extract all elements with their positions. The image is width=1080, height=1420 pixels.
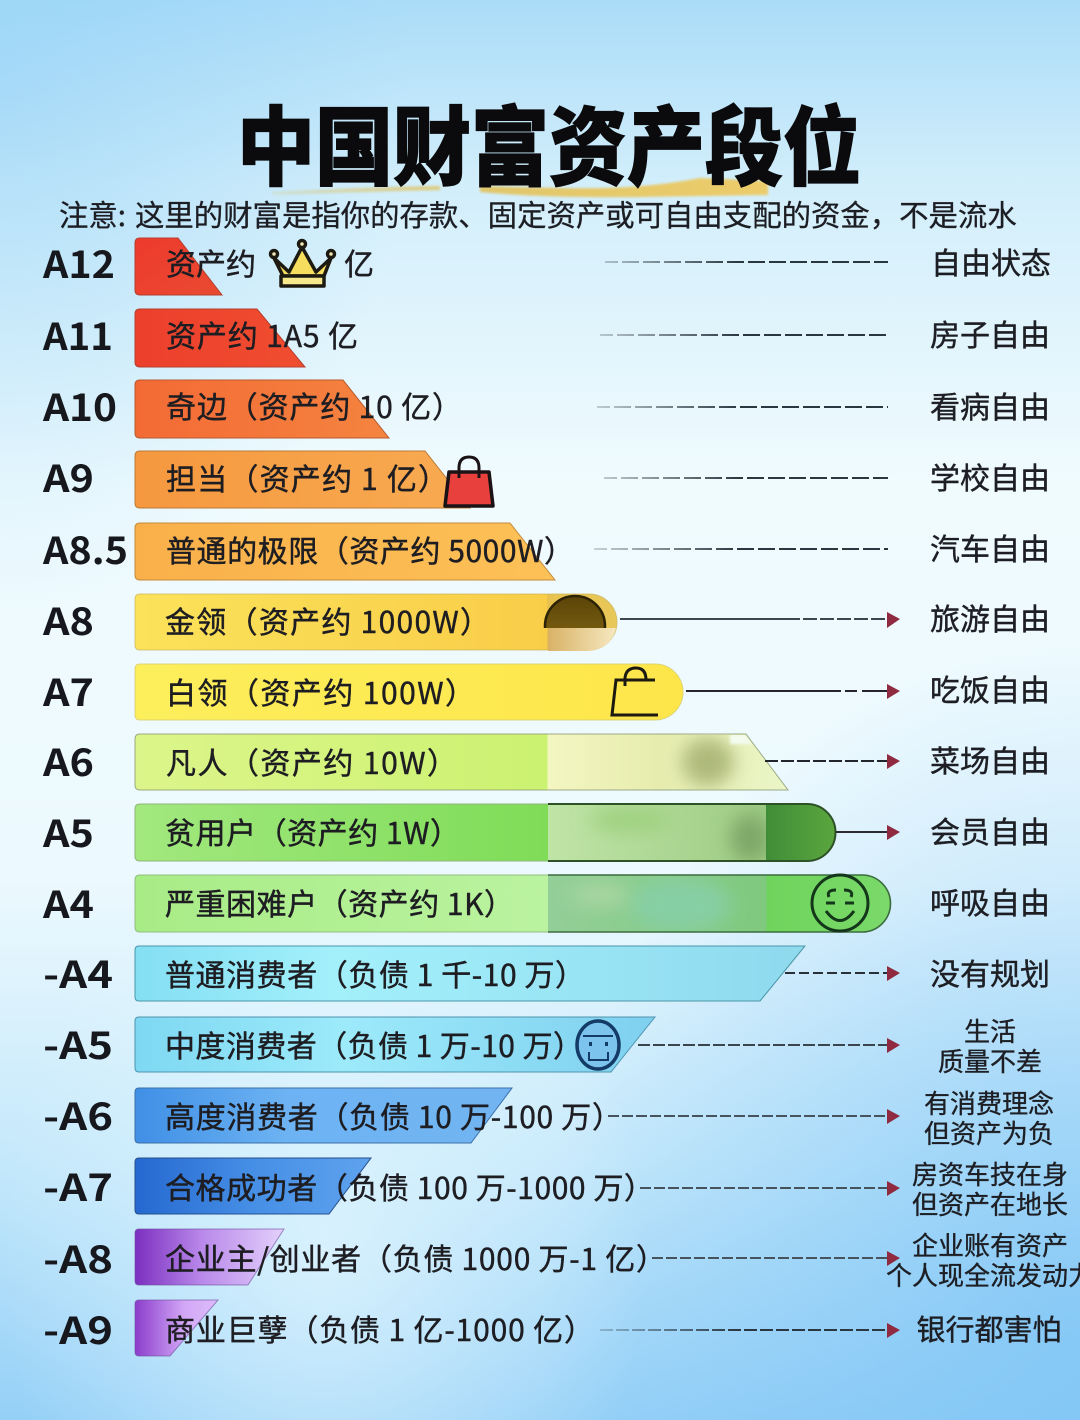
- bar A4: [135, 875, 890, 932]
- bar -A6: [135, 1088, 512, 1143]
- level A12: A12: [42, 235, 115, 289]
- bar text A12: 资产约: [166, 240, 256, 284]
- row: A9: [42, 449, 1050, 508]
- row: A5: [42, 804, 1050, 862]
- bar -A4: [135, 946, 805, 1001]
- bar text A10: 奇边（资产约 10 亿）: [166, 383, 462, 427]
- connector A12: [605, 261, 888, 263]
- bar text A6: 凡人（资产约 10W）: [166, 739, 457, 783]
- row: A11: [42, 307, 1050, 367]
- bar A11: [135, 309, 305, 367]
- outcome -A7: [912, 1155, 1068, 1222]
- level A6: A6: [42, 733, 94, 787]
- connector A11: [600, 334, 888, 336]
- connector -A5: [638, 1038, 900, 1053]
- outcome A4: 呼吸自由: [930, 879, 1050, 923]
- bar text -A8: 企业主/创业者（负债 1000 万-1 亿）: [165, 1235, 666, 1279]
- connector -A6: [608, 1109, 900, 1124]
- bar text -A9: 商业巨孽（负债 1 亿-1000 亿）: [165, 1306, 594, 1350]
- bar text -A5: 中度消费者（负债 1 万-10 万）: [165, 1022, 583, 1066]
- icon: coin: [544, 594, 606, 628]
- level -A4: -A4: [43, 945, 113, 999]
- row: A7: [42, 663, 1050, 720]
- outcome -A6: [924, 1084, 1054, 1151]
- level A8.5: A8.5: [42, 521, 128, 575]
- bar A9: [135, 451, 470, 508]
- row: A12: [42, 235, 1051, 295]
- bar -A8: [135, 1229, 284, 1285]
- level A10: A10: [42, 378, 117, 432]
- connector A7: [686, 684, 900, 699]
- outcome -A9: 银行都害怕: [916, 1307, 1062, 1349]
- outcome A6: 菜场自由: [930, 737, 1050, 781]
- outcome A8: 旅游自由: [930, 595, 1050, 639]
- bar text A11: 资产约 1A5 亿: [166, 312, 358, 356]
- bar A8: [135, 594, 617, 651]
- outcome A7: 吃饭自由: [930, 666, 1050, 710]
- level -A7: -A7: [43, 1158, 113, 1212]
- bar text A4: 严重困难户（资产约 1K）: [165, 880, 514, 924]
- bar text A12: [166, 240, 374, 284]
- bar A5: [135, 804, 835, 862]
- connector A9: [604, 477, 888, 479]
- connector A5: [836, 825, 900, 840]
- connector -A8: [652, 1251, 900, 1266]
- row: -A4: [43, 945, 1050, 1001]
- level A11: A11: [42, 307, 113, 361]
- connector -A4: [785, 966, 900, 981]
- row: A6: [42, 733, 1050, 790]
- level A5: A5: [42, 804, 94, 858]
- bar text A8: 金领（资产约 1000W）: [165, 598, 490, 642]
- row: A8.5: [42, 521, 1050, 580]
- bar text -A4: 普通消费者（负债 1 千-10 万）: [165, 951, 585, 995]
- connector A8.5: [594, 548, 888, 550]
- outcome A8.5: 汽车自由: [930, 525, 1050, 569]
- outcome -A8: 企业账有资产: [912, 1226, 1068, 1263]
- bar text A8.5: 普通的极限（资产约 5000W）: [166, 527, 574, 571]
- bar text A9: 担当（资产约 1 亿）: [166, 455, 448, 499]
- bar -A9: [135, 1300, 218, 1356]
- bar text -A6: 高度消费者（负债 10 万-100 万）: [165, 1093, 622, 1137]
- title text: 中国财富资产段位: [237, 79, 861, 203]
- bar A6: [135, 734, 788, 790]
- row: -A9: [43, 1300, 1062, 1356]
- level -A8: -A8: [43, 1230, 113, 1284]
- level A8: A8: [42, 592, 94, 646]
- connector A10: [597, 406, 888, 408]
- title underline swoosh: [272, 178, 768, 197]
- level A4: A4: [42, 875, 94, 929]
- outcome -A6: 有消费理念: [924, 1084, 1054, 1121]
- connector -A7: [640, 1181, 900, 1196]
- bar text A7: 白领（资产约 100W）: [166, 669, 475, 713]
- bar A8.5: [135, 523, 555, 580]
- subtitle note: 这里的财富是指你的存款、固定资产或可自由支配的资金，不是流水: [135, 193, 1017, 235]
- row: A10: [42, 378, 1050, 438]
- title: [237, 79, 861, 203]
- bar -A5: [135, 1017, 655, 1072]
- bar A12: [135, 238, 222, 295]
- outcome -A7: 但资产在地长: [912, 1185, 1068, 1222]
- icon: smiley: [812, 875, 868, 931]
- bar text -A7: 合格成功者（负债 100 万-1000 万）: [165, 1164, 654, 1208]
- bar -A7: [135, 1158, 371, 1214]
- outcome -A5: 生活: [964, 1012, 1016, 1049]
- icon: red bag: [445, 457, 493, 506]
- icon: outline bag: [612, 668, 658, 715]
- outcome A11: 房子自由: [930, 311, 1050, 355]
- bar A7: [135, 664, 683, 720]
- level -A5: -A5: [43, 1016, 113, 1070]
- bar text A12: 亿: [344, 240, 374, 284]
- connector A8: [620, 612, 900, 628]
- row: A8: [42, 594, 1047, 651]
- bar A10: [135, 380, 389, 438]
- subtitle note: 注意:: [59, 193, 126, 235]
- row: -A5: [43, 1012, 1042, 1079]
- outcome -A8: [886, 1226, 1080, 1293]
- outcome -A5: [938, 1012, 1042, 1079]
- icon: face: [577, 1021, 619, 1069]
- outcome -A4: 没有规划: [930, 950, 1050, 994]
- level A9: A9: [42, 449, 94, 503]
- connector -A9: [600, 1323, 900, 1338]
- connector A6: [765, 754, 900, 769]
- bar text A5: 贫用户（资产约 1W）: [165, 809, 460, 853]
- outcome A9: 学校自由: [930, 454, 1050, 498]
- outcome A5: 会员自由: [930, 808, 1050, 852]
- row: -A7: [43, 1155, 1068, 1222]
- level -A6: -A6: [43, 1087, 113, 1141]
- outcome -A7: 房资车技在身: [912, 1155, 1068, 1192]
- outcome -A5: 质量不差: [938, 1042, 1042, 1079]
- row: -A8: [43, 1226, 1080, 1293]
- row: -A6: [43, 1084, 1054, 1151]
- outcome A10: 看病自由: [930, 383, 1050, 427]
- row: A4: [42, 875, 1050, 932]
- outcome -A6: 但资产为负: [924, 1114, 1054, 1151]
- icon: crown: [270, 240, 334, 286]
- level -A9: -A9: [43, 1301, 113, 1355]
- outcome A12: 自由状态: [931, 239, 1051, 283]
- level A7: A7: [42, 663, 94, 717]
